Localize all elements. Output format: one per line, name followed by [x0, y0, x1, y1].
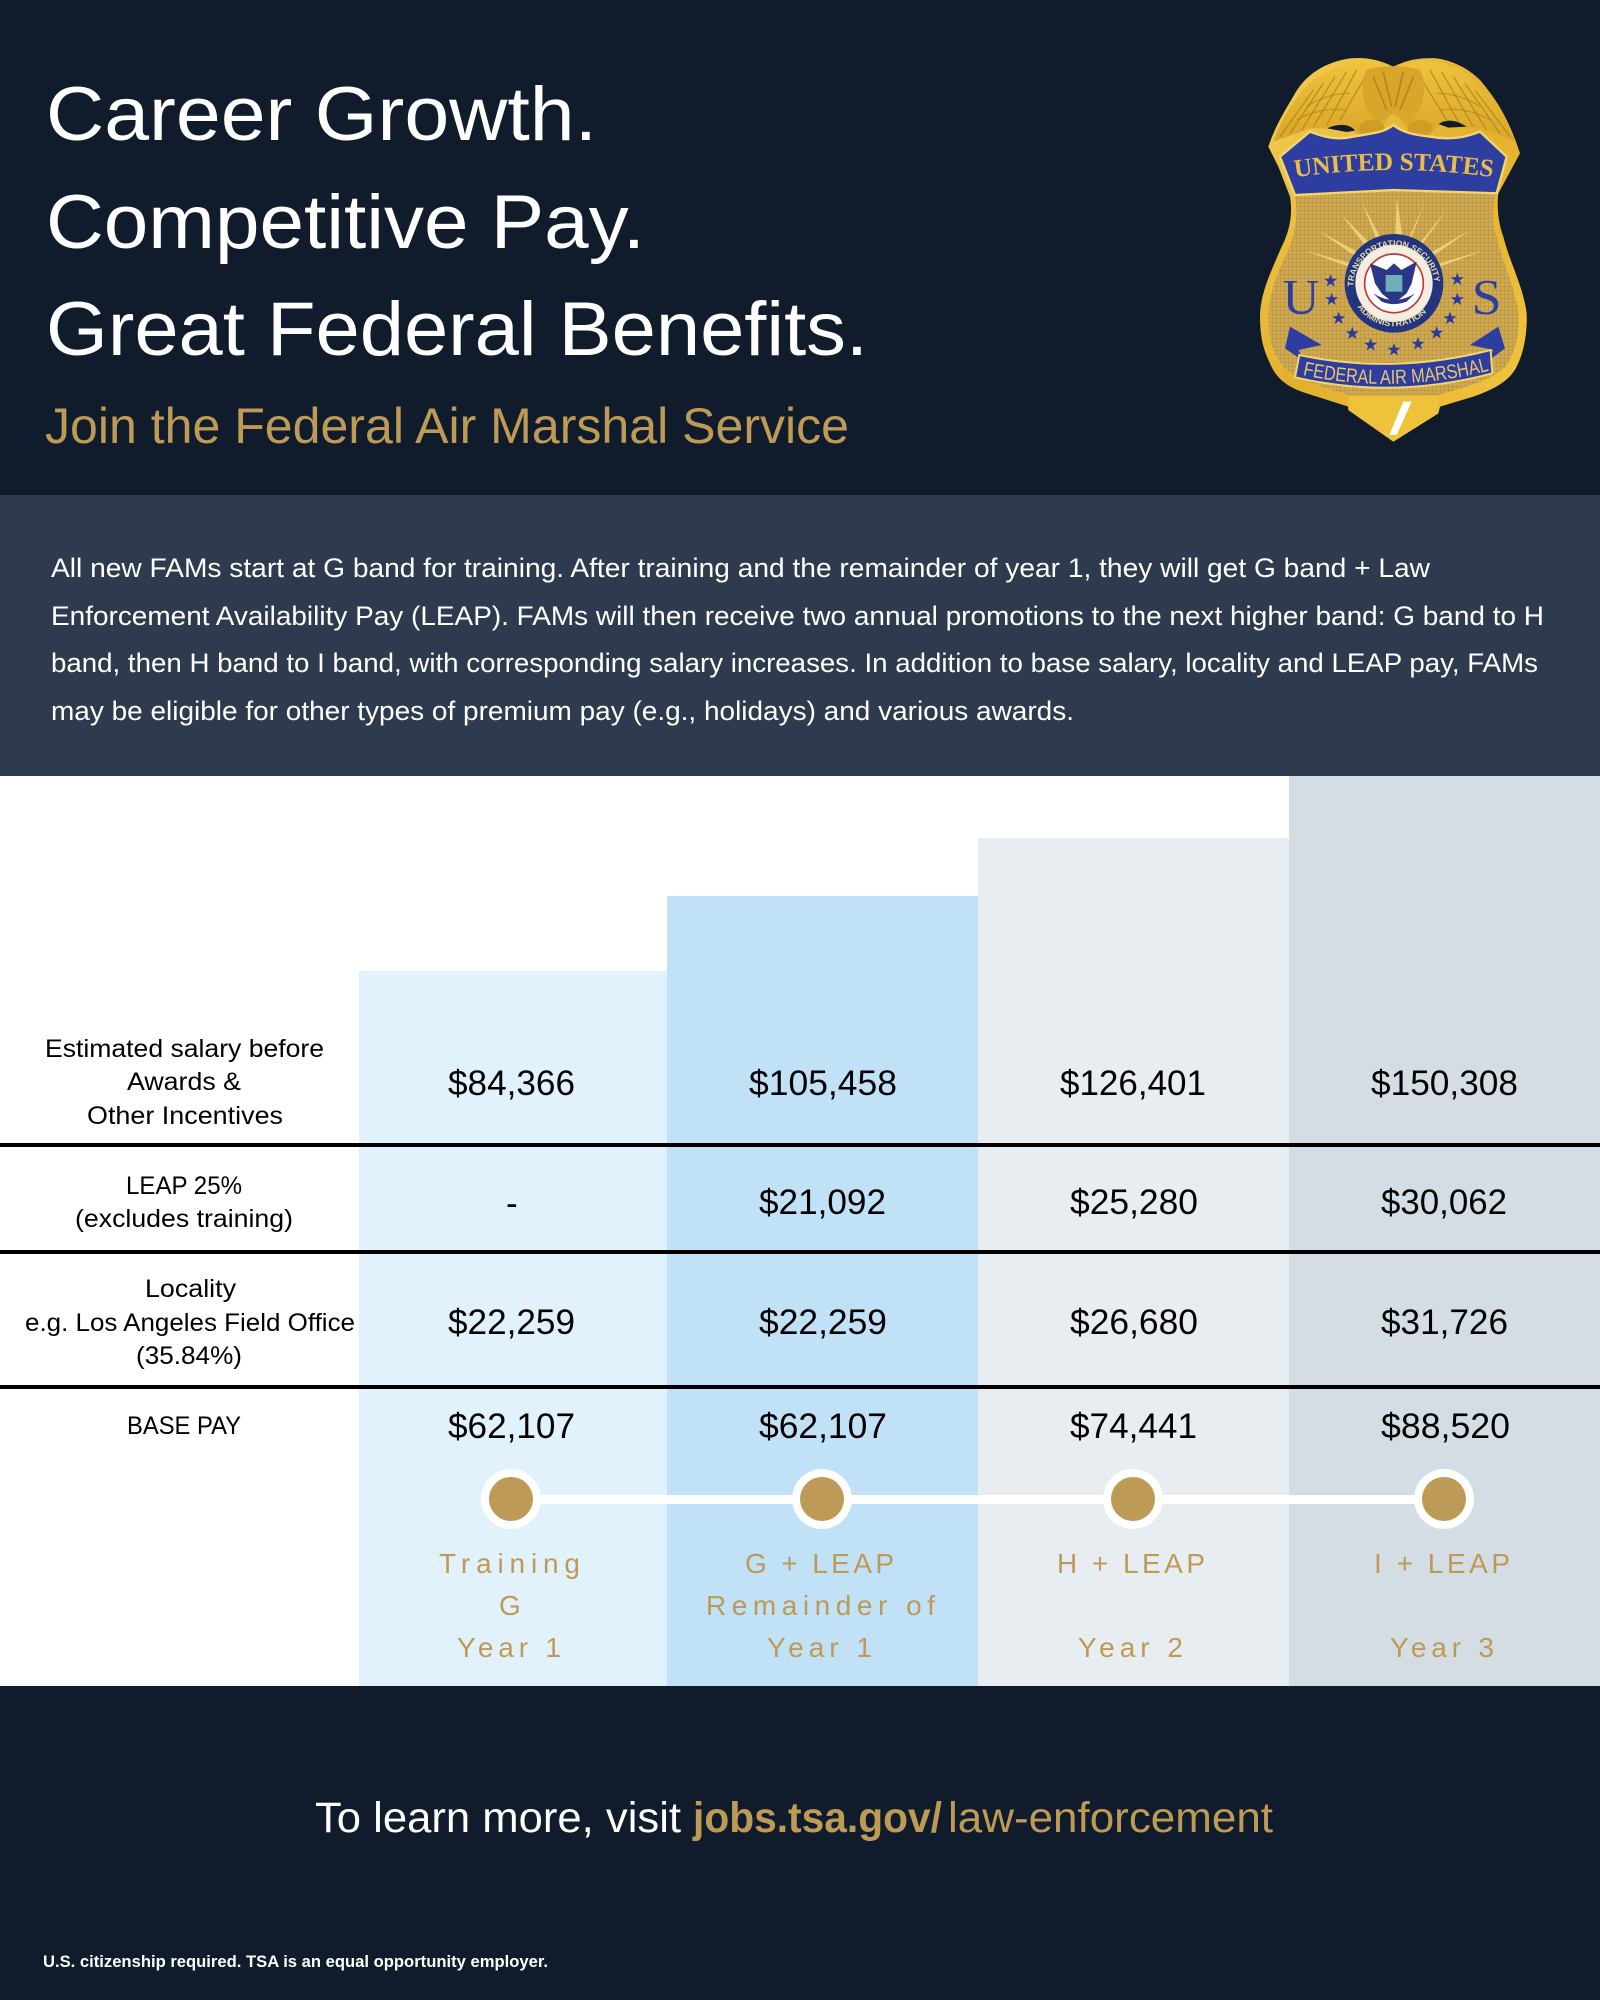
icon: federal air marshal badge: [1260, 58, 1527, 442]
stars: ★: [1429, 323, 1444, 343]
title: [46, 72, 868, 372]
letters U S: S: [1472, 268, 1502, 324]
intro paragraph: [51, 553, 1544, 726]
call to action: To learn more, visit: [315, 1794, 681, 1842]
letters U S: [1283, 268, 1502, 324]
intro paragraph: All new FAMs start at G band for training. After training and the remainder of year 1, they will get G band + Law: [51, 553, 1431, 583]
panel: intro text band: [0, 495, 1600, 776]
salary values: -: [506, 1184, 518, 1223]
badge tab: [1348, 397, 1438, 442]
stars: ★: [1345, 324, 1360, 344]
stars: [1323, 270, 1465, 361]
row labels: BASE PAY: [127, 1412, 241, 1440]
letters U S: U: [1283, 268, 1319, 324]
timeline labels: Remainder of: [706, 1590, 935, 1621]
seal: TRANSPORTATION SECURITY: [1348, 240, 1440, 286]
salary values: $21,092: [759, 1183, 886, 1222]
header background: [0, 0, 1600, 495]
title: Career Growth.: [46, 72, 597, 157]
intro paragraph: band, then H band to I band, with corresponding salary increases. In addition to base salary, locality and LEAP pay, FAMs: [51, 648, 1538, 678]
salary values: $84,366: [448, 1064, 575, 1103]
salary values: $62,107: [759, 1407, 887, 1446]
timeline labels: H + LEAP: [1057, 1548, 1205, 1579]
title: Competitive Pay.: [46, 180, 645, 265]
salary values: [448, 1064, 1518, 1446]
row labels: Awards &: [127, 1068, 241, 1096]
row labels: Other Incentives: [87, 1102, 283, 1130]
shield field: [1268, 190, 1519, 395]
footer background: [0, 1686, 1600, 2000]
salary values: $31,726: [1381, 1303, 1508, 1342]
timeline labels: G + LEAP: [745, 1548, 894, 1579]
row labels: LEAP 25%: [126, 1172, 242, 1200]
stars: ★: [1442, 309, 1458, 329]
row labels: (excludes training): [75, 1205, 293, 1233]
timeline labels: [439, 1548, 1510, 1663]
seal: [1344, 234, 1444, 333]
stars: ★: [1363, 336, 1378, 356]
blue banner: [1280, 125, 1507, 195]
timeline labels: Year 2: [1078, 1632, 1183, 1663]
timeline labels: Year 1: [457, 1632, 561, 1663]
row labels: (35.84%): [136, 1342, 242, 1370]
salary values: $62,107: [448, 1407, 575, 1446]
salary values: $105,458: [749, 1064, 897, 1103]
timeline labels: Year 1: [767, 1632, 872, 1663]
row labels: Locality: [145, 1275, 237, 1303]
ribbon: FEDERAL AIR MARSHAL: [1304, 358, 1489, 384]
call to action: law-enforcement: [948, 1794, 1273, 1842]
salary values: $126,401: [1060, 1064, 1206, 1103]
salary values: $150,308: [1371, 1064, 1518, 1103]
seal: ADMINISTRATION: [1358, 306, 1426, 326]
call to action: jobs.tsa.gov/: [692, 1794, 942, 1842]
stars: ★: [1386, 341, 1402, 361]
timeline labels: Training: [439, 1548, 580, 1579]
stars: ★: [1323, 272, 1338, 292]
salary values: $88,520: [1381, 1407, 1510, 1446]
salary values: $74,441: [1070, 1407, 1197, 1446]
stars: ★: [1331, 309, 1346, 329]
rays: [1303, 197, 1485, 283]
salary values: $30,062: [1381, 1183, 1507, 1222]
intro paragraph: Enforcement Availability Pay (LEAP). FAMs will then receive two annual promotions to the next higher band: G band to H: [51, 601, 1544, 631]
eagle wings: [1273, 62, 1515, 142]
timeline labels: Year 3: [1390, 1632, 1494, 1663]
row dividers: [0, 1143, 1600, 1389]
stars: ★: [1410, 334, 1426, 354]
disclaimer: U.S. citizenship required. TSA is an equal opportunity employer.: [43, 1952, 548, 1971]
row labels: [25, 1035, 355, 1440]
bar chart: stepped salary columns: [359, 776, 1600, 1686]
banner text: UNITED STATES: [1293, 153, 1493, 176]
timeline: [481, 1469, 1474, 1529]
stars: ★: [1324, 290, 1339, 310]
timeline labels: I + LEAP: [1374, 1548, 1510, 1579]
salary values: $22,259: [759, 1303, 887, 1342]
stars: ★: [1450, 290, 1465, 310]
row labels: Estimated salary before: [45, 1035, 324, 1063]
intro paragraph: may be eligible for other types of premium pay (e.g., holidays) and various awards.: [51, 696, 1074, 726]
salary values: $22,259: [448, 1303, 575, 1342]
call to action: [315, 1794, 1273, 1842]
salary values: $25,280: [1070, 1183, 1198, 1222]
stars: ★: [1450, 270, 1465, 290]
title: Great Federal Benefits.: [46, 287, 868, 372]
panel: salary table background: [0, 776, 1600, 1687]
subtitle: Join the Federal Air Marshal Service: [45, 398, 849, 454]
row labels: e.g. Los Angeles Field Office: [25, 1309, 355, 1337]
ribbon: [1285, 326, 1505, 389]
salary values: $26,680: [1070, 1303, 1198, 1342]
timeline labels: G: [499, 1590, 521, 1621]
